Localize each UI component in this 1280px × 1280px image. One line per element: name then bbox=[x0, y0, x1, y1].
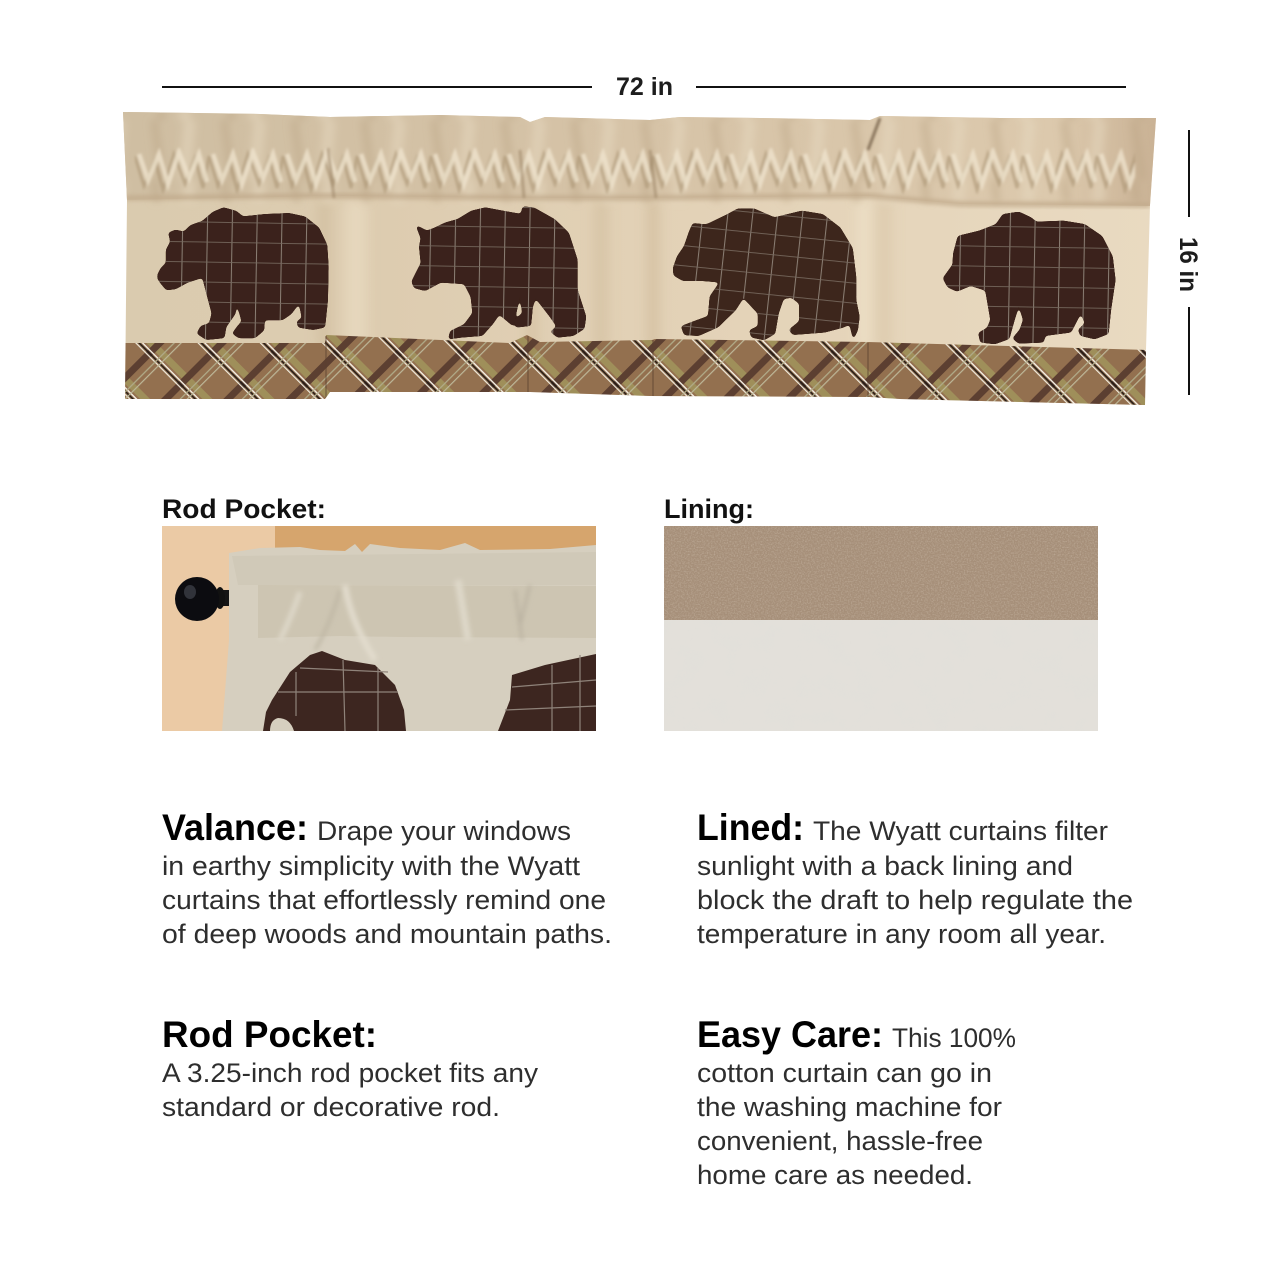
lining photo bbox=[664, 526, 1098, 731]
text block: Easy Care: This 100% bbox=[892, 1023, 1016, 1053]
heading: Rod Pocket: Rod Pocket: bbox=[162, 494, 326, 524]
bear 3 bbox=[674, 209, 859, 339]
text block: Easy Care bbox=[697, 1014, 1016, 1190]
height dimension: 16 in: 16 in bbox=[1174, 237, 1202, 292]
text block: Valance: curtains that effortlessly remind one bbox=[162, 885, 606, 915]
text block: Rod Pocket: standard or decorative rod. bbox=[162, 1092, 500, 1122]
text block: Lined: Lined: bbox=[697, 807, 804, 848]
rod pocket photo bbox=[162, 526, 596, 731]
text block: Easy Care: Easy Care: bbox=[697, 1014, 883, 1055]
text block: Rod Pocket bbox=[162, 1014, 539, 1122]
bear 2 bbox=[412, 207, 585, 338]
bear 1 bbox=[158, 208, 328, 339]
text block: Valance bbox=[162, 807, 612, 949]
text block: Rod Pocket: A 3.25-inch rod pocket fits any bbox=[162, 1058, 539, 1088]
bear 4 bbox=[944, 213, 1115, 343]
bears on the rod pocket curtain bbox=[263, 651, 596, 731]
heading: Lining: Lining: bbox=[664, 494, 754, 524]
shaded fabric folds bbox=[318, 200, 892, 350]
curtain rod and finial bbox=[175, 577, 229, 621]
plaid border bbox=[120, 335, 1150, 410]
valance curtain photo bbox=[120, 110, 1160, 410]
curtain fabric bbox=[222, 543, 596, 731]
panel seams bbox=[328, 118, 880, 198]
width dimension: 72 in: 72 in bbox=[616, 73, 673, 101]
text block: Valance: Valance: bbox=[162, 807, 308, 848]
text block: Valance: Drape your windows bbox=[317, 816, 571, 846]
text block: Easy Care: convenient, hassle-free bbox=[697, 1126, 983, 1156]
text block: Lined: block the draft to help regulate the bbox=[697, 885, 1133, 915]
wooden board bbox=[275, 526, 596, 552]
text block: Lined: temperature in any room all year. bbox=[697, 919, 1106, 949]
text block: Easy Care: cotton curtain can go in bbox=[697, 1058, 992, 1088]
rod pocket gathered band bbox=[120, 110, 1160, 206]
text block: Easy Care: the washing machine for bbox=[697, 1092, 1002, 1122]
text block: Lined bbox=[697, 807, 1133, 949]
text block: Valance: in earthy simplicity with the Wyatt bbox=[162, 851, 581, 881]
text block: Valance: of deep woods and mountain paths. bbox=[162, 919, 612, 949]
text block: Lined: sunlight with a back lining and bbox=[697, 851, 1073, 881]
bears on the valance bbox=[158, 207, 1115, 343]
text block: Easy Care: home care as needed. bbox=[697, 1160, 973, 1190]
text block: Lined: The Wyatt curtains filter bbox=[813, 816, 1108, 846]
text block: Rod Pocket: Rod Pocket: bbox=[162, 1014, 377, 1055]
